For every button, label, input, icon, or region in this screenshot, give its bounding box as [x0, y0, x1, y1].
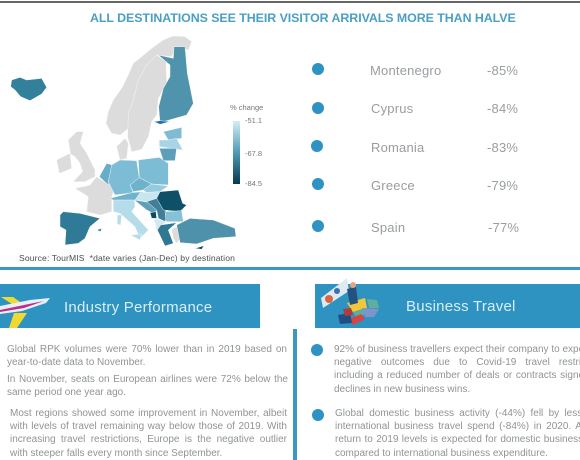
row: Montenegro: -85% — [487, 63, 518, 78]
paragraph: seats: In November, seats on European airlines were 72% below the — [7, 374, 288, 385]
row: Romania: Romania — [371, 140, 424, 155]
paragraph: regions: with steeper falls every month since September. — [10, 448, 222, 459]
panel header: Business Travel — [315, 284, 580, 328]
Iceland — [11, 77, 47, 101]
France — [75, 177, 113, 215]
Slovakia — [143, 184, 168, 193]
Balearic islands — [97, 228, 102, 232]
Spain — [60, 212, 100, 245]
legend title: % change — [230, 103, 263, 112]
Estonia — [163, 127, 182, 140]
Albania and North Macedonia — [154, 218, 167, 230]
panel header: Industry Performance — [0, 284, 260, 328]
Norway — [106, 36, 192, 135]
United Kingdom — [68, 132, 95, 182]
Romania — [157, 190, 187, 212]
row: Spain — [312, 220, 519, 235]
paragraph: regions — [10, 408, 287, 459]
row: Spain: Spain — [371, 220, 405, 235]
vertical column divider — [293, 329, 297, 460]
section divider — [0, 267, 580, 270]
Turkey — [177, 218, 236, 244]
icon: business meeting — [321, 278, 379, 325]
legend colour ramp — [233, 121, 240, 184]
title: ALL DESTINATIONS SEE THEIR VISITOR ARRIVALS MORE THAN HALVE — [90, 11, 516, 25]
row: Cyprus — [312, 101, 518, 116]
Sweden — [128, 55, 167, 152]
paragraph: RPK volumes — [7, 344, 287, 368]
top border line — [0, 1, 580, 3]
paragraph: regions: Most regions showed some improvement in November, albeit — [10, 408, 287, 419]
Hungary — [135, 192, 160, 202]
icon: airplane — [0, 297, 50, 328]
Sardinia — [117, 215, 122, 225]
row: Romania — [311, 140, 518, 155]
paragraph: RPK volumes: year-to-date data to November. — [7, 357, 145, 368]
row: Spain: -77% — [488, 220, 519, 235]
paragraph: regions: with levels of travel remaining way below those of 2019. With — [10, 421, 287, 432]
Poland — [138, 157, 168, 185]
Germany — [108, 160, 139, 195]
legend: % change — [230, 103, 263, 188]
Denmark — [117, 138, 128, 160]
Italy — [113, 200, 148, 238]
screen — [321, 278, 349, 308]
row: Cyprus: Cyprus — [371, 101, 413, 116]
text block: Industry Performance — [7, 344, 288, 459]
legend: % change: -67.8 — [245, 149, 262, 158]
table — [347, 298, 367, 312]
Austria — [110, 192, 143, 202]
text block: Business Travel — [311, 344, 580, 459]
row: Montenegro: Montenegro — [370, 63, 441, 78]
map source note: Source: TourMIS *date varies (Jan-Dec) by destination — [19, 253, 235, 263]
legend labels: -51.1 — [245, 116, 262, 125]
map of Europe — [10, 36, 236, 250]
row: Greece: -79% — [487, 178, 518, 193]
Croatia and Bosnia — [134, 200, 160, 213]
paragraph: regions: increasing travel restrictions, Europe is the negative outlier — [10, 434, 287, 445]
Finland — [158, 47, 193, 123]
Greek Aegean — [172, 227, 180, 243]
heading text: Industry Performance — [64, 299, 212, 316]
row: Romania: -83% — [487, 140, 518, 155]
paragraph: seats — [7, 374, 288, 398]
Czechia — [130, 178, 152, 192]
Bulgaria — [165, 211, 183, 222]
Serbia — [147, 198, 168, 222]
Estonia coast accent — [154, 121, 170, 124]
Netherlands and Belgium — [99, 163, 113, 187]
ranking list — [311, 63, 519, 235]
Cyprus — [195, 246, 204, 249]
bullet: domestic activity — [312, 408, 580, 459]
Latvia — [159, 138, 183, 150]
row: Greece — [312, 178, 518, 193]
Montenegro — [150, 212, 157, 218]
row: Greece: Greece — [371, 178, 415, 193]
bullet: travellers expectation — [311, 344, 580, 395]
heading text: Business Travel — [406, 298, 516, 315]
Lithuania — [159, 148, 177, 161]
bullet: travellers expectation: declines in new business wins. — [334, 384, 470, 395]
row: Cyprus: -84% — [487, 101, 518, 116]
legend: % change: -84.5 — [245, 179, 262, 188]
people — [347, 287, 358, 305]
row: Montenegro — [312, 63, 518, 78]
Ireland — [57, 153, 72, 173]
paragraph: seats: same period one year ago. — [7, 387, 126, 398]
Greece — [157, 223, 177, 246]
Sicily — [131, 234, 142, 240]
bullet: domestic activity: compared to international business expenditure. — [335, 448, 548, 459]
paragraph: RPK volumes: Global RPK volumes were 70% lower than in 2019 based on — [7, 344, 287, 355]
